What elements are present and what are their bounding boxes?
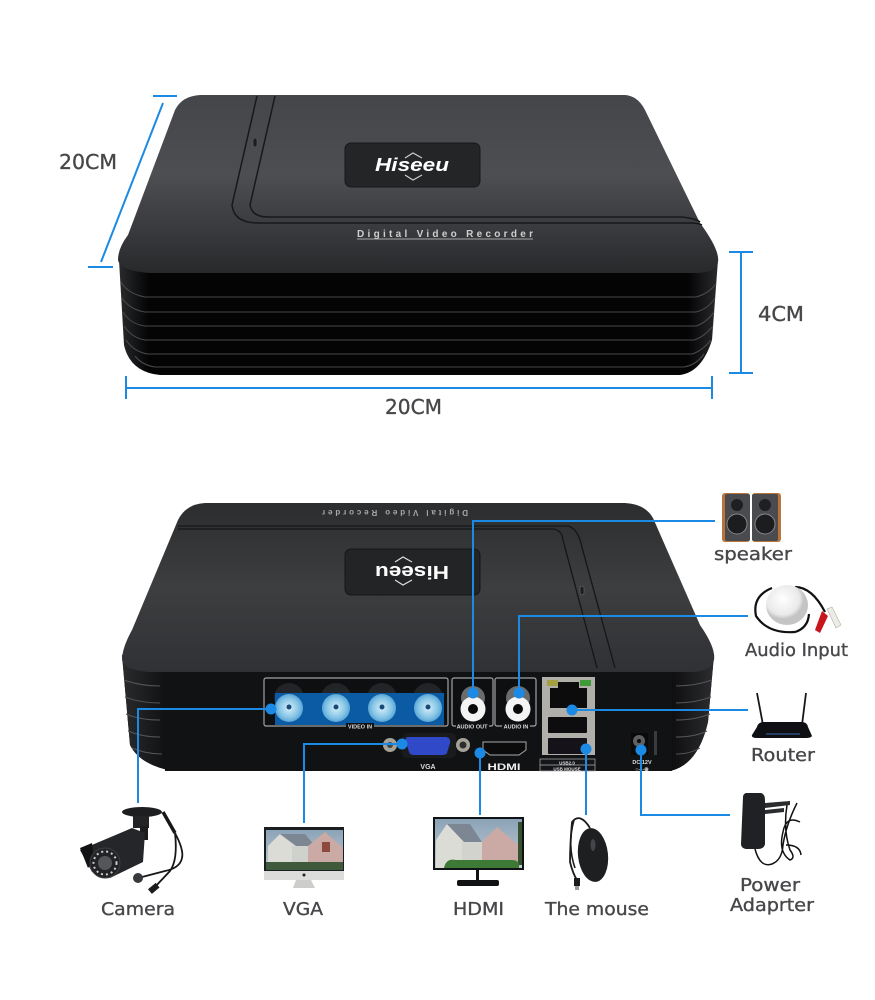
audio out port: AUDIO OUT [457,724,488,730]
video in ports [264,678,448,730]
product label: Digital Video Recorder [357,229,533,240]
LED indicator rear [580,586,584,595]
reversed logo plate: Hiseeu [375,562,449,582]
icon: mouse [570,818,611,890]
logo plate: Hiseeu [375,155,449,175]
icon: router [752,693,812,738]
label: VGA: VGA [283,899,324,920]
DC power port: ○-◦-⊕ [635,767,649,773]
top surface rear [122,503,714,672]
icon: security camera [80,807,182,894]
label: Power Adaprter [730,875,815,916]
DC power port: DC 12V [632,760,652,766]
icon: speakers [722,493,781,542]
label: HDMI: HDMI [453,899,504,920]
dimension: depth 20CM: 20CM [59,150,117,174]
right fins [670,655,714,771]
icon: power adapter [741,793,801,865]
rear body [122,655,714,771]
USB label [540,759,595,771]
label: Router: Router [751,745,816,766]
audio out port [452,678,493,730]
reversed logo plate [345,549,480,595]
DC power port [631,731,657,773]
recessed panel outline rear [178,526,615,668]
left fins [122,655,173,771]
USB label: USB2.0 [559,760,575,765]
dimension: height 4CM: 4CM [758,302,804,326]
VGA port [383,733,470,771]
back plate [165,672,672,771]
label: Audio Input: Audio Input [745,640,848,661]
reversed product label: Digital Video Recorder [322,508,468,517]
HDMI port: HDMI [488,762,520,772]
HDMI port [483,742,526,772]
label: Power Adaprter: Adaprter [730,895,815,916]
dimension: width 20CM: 20CM [385,395,442,419]
USB label: USB MOUSE [553,766,581,771]
VGA port: VGA [420,764,436,771]
front face with ribs [119,260,718,375]
panel: top view of DVR [118,95,718,375]
dimension: height 4CM [729,252,804,373]
panel: rear view of DVR [122,503,714,773]
top surface [118,95,718,273]
LED indicator [253,138,257,147]
dimension: width 20CM [126,376,712,419]
icon: HDMI monitor [433,817,524,886]
logo plate [345,143,480,187]
audio in port: AUDIO IN [504,724,528,730]
label: speaker: speaker [714,544,793,565]
dimension: depth 20CM [59,96,177,267]
audio in port [495,678,536,730]
ethernet and USB block [542,677,595,755]
video in ports: VIDEO IN [348,724,372,730]
label: Camera: Camera [101,899,175,920]
recessed panel outline [232,96,702,225]
label: Power Adaprter: Power [740,875,801,896]
icon: microphone [755,585,841,633]
connector lines [138,521,748,823]
icon: VGA monitor [264,827,344,888]
label: The mouse: The mouse [544,899,649,920]
